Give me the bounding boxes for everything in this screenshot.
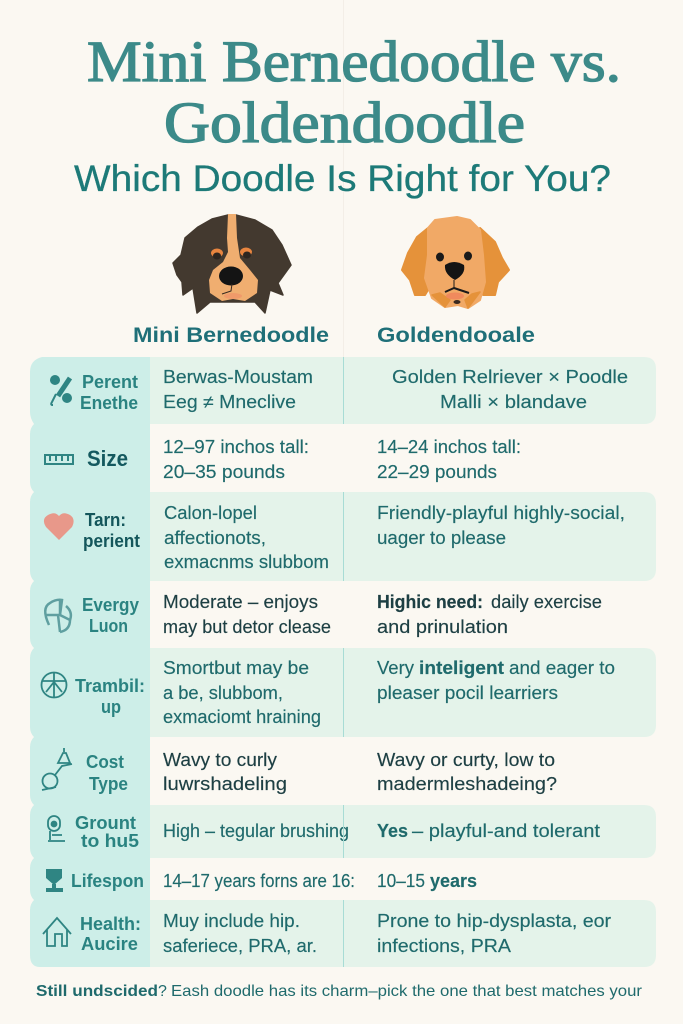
row: trainability: pleaser pocil learriers — [377, 683, 558, 703]
row: parent breeds: Eeg ≠ Mneclive — [163, 392, 296, 412]
row: size: Size — [87, 446, 128, 471]
row: energy level: Moderate – enjoys — [163, 592, 318, 612]
row: temperament: Tarn: — [85, 510, 126, 530]
row: lifespan: 14–17 years forns are 16: — [163, 871, 355, 891]
row: parent breeds: Enethe — [80, 393, 138, 413]
row: coat type: Wavy or curty, low to — [377, 750, 555, 770]
row: parent breeds: Malli × blandave — [440, 392, 587, 412]
column heading: Mini Bernedoodle: Mini Bernedoodle — [133, 324, 329, 347]
row: trainability: a be, slubbom, — [163, 683, 283, 703]
comparison table — [30, 357, 656, 967]
row: parent breeds: Berwas-Moustam — [163, 367, 313, 387]
row: energy level: Evergy — [82, 595, 139, 615]
icon: energy — [45, 600, 71, 632]
row: trainability: inteligent — [419, 658, 504, 678]
title — [87, 29, 621, 155]
row: energy level: daily exercise — [491, 592, 602, 612]
icon: lifespan — [46, 869, 63, 892]
row: temperament: exmacnms slubbom — [164, 552, 329, 572]
subtitle: Which Doodle Is Right for You? — [74, 158, 611, 199]
row: good with kids: High – tegular brushing — [163, 821, 349, 841]
row: health: infections, PRA — [377, 936, 511, 956]
row: coat type — [30, 737, 557, 805]
row: health: Prone to hip-dysplasta, eor — [377, 911, 611, 931]
row: size: 22–29 pounds — [377, 462, 497, 482]
row: trainability: exmaciomt hraining — [163, 707, 321, 727]
row: health: Muy include hip. — [163, 911, 300, 931]
row: size: 20–35 pounds — [163, 462, 285, 482]
row: size — [30, 424, 521, 492]
icon: Goldendoodle face — [402, 217, 509, 308]
footer note: ? — [158, 983, 167, 1000]
row: lifespan: Lifespon — [71, 871, 144, 891]
row: temperament: Calon-lopel — [164, 503, 257, 523]
icon: parent — [51, 376, 71, 405]
row: energy level: may but detor clease — [163, 617, 331, 637]
row: trainability — [30, 648, 656, 737]
footer note: Eash doodle has its charm–pick the one that best matches your — [171, 983, 643, 1000]
row: temperament: affectionots, — [164, 528, 266, 548]
row: good with kids: Yes — [377, 821, 408, 841]
row: coat type: Wavy to curly — [163, 750, 277, 770]
row: parent breeds: Golden Relriever × Poodle — [392, 367, 628, 387]
icon: coat — [42, 748, 72, 790]
row: temperament: uager to please — [377, 528, 506, 548]
row: parent breeds — [30, 357, 656, 424]
title: Mini Bernedoodle vs. — [87, 29, 621, 94]
icon: ruler — [45, 455, 73, 464]
column heading: Goldendoodle: Goldendooale — [377, 324, 535, 347]
row: size: 12–97 inchos tall: — [163, 437, 309, 457]
row: health: Health: — [80, 914, 141, 934]
row: energy level: and prinulation — [377, 617, 508, 637]
row: lifespan — [30, 858, 477, 900]
row: coat type: Type — [89, 774, 128, 794]
row: temperament — [30, 492, 656, 581]
icon: heart — [44, 513, 74, 540]
row: lifespan: 10–15 — [377, 871, 425, 891]
row: health: Aucire — [81, 934, 138, 954]
row: lifespan: years — [430, 871, 477, 891]
row: trainability: and eager to — [509, 658, 615, 678]
row: trainability: Smortbut may be — [163, 658, 309, 678]
row: temperament: perient — [83, 531, 140, 551]
row: coat type: luwrshadeling — [163, 774, 287, 794]
row: health — [30, 900, 656, 967]
icon: Mini Bernedoodle face — [173, 214, 291, 313]
footer note: Still undscided — [36, 983, 158, 1000]
title: Goldendoodle — [164, 90, 525, 155]
row: parent breeds: Perent — [82, 372, 138, 392]
row: health: saferiece, PRA, ar. — [163, 936, 317, 956]
row: trainability: up — [101, 697, 121, 717]
row: coat type: madermleshadeing? — [377, 774, 557, 794]
row: energy level: Luon — [89, 616, 128, 636]
row: good with kids: – playful-and tolerant — [412, 821, 600, 841]
row: energy level: Highic need: — [377, 592, 483, 612]
icon: ground — [48, 816, 65, 841]
row: coat type: Cost — [86, 752, 124, 772]
row: good with kids: Grount — [75, 813, 136, 833]
row: trainability: Very — [377, 658, 414, 678]
row: trainability: Trambil: — [75, 676, 145, 696]
row: temperament: Friendly-playful highly-social, — [377, 503, 625, 523]
row: good with kids: to hu5 — [81, 831, 139, 851]
icon: training globe — [42, 672, 66, 698]
row: good with kids — [30, 805, 656, 858]
icon: house — [43, 918, 71, 946]
row: energy level — [30, 581, 602, 648]
row: size: 14–24 inchos tall: — [377, 437, 521, 457]
